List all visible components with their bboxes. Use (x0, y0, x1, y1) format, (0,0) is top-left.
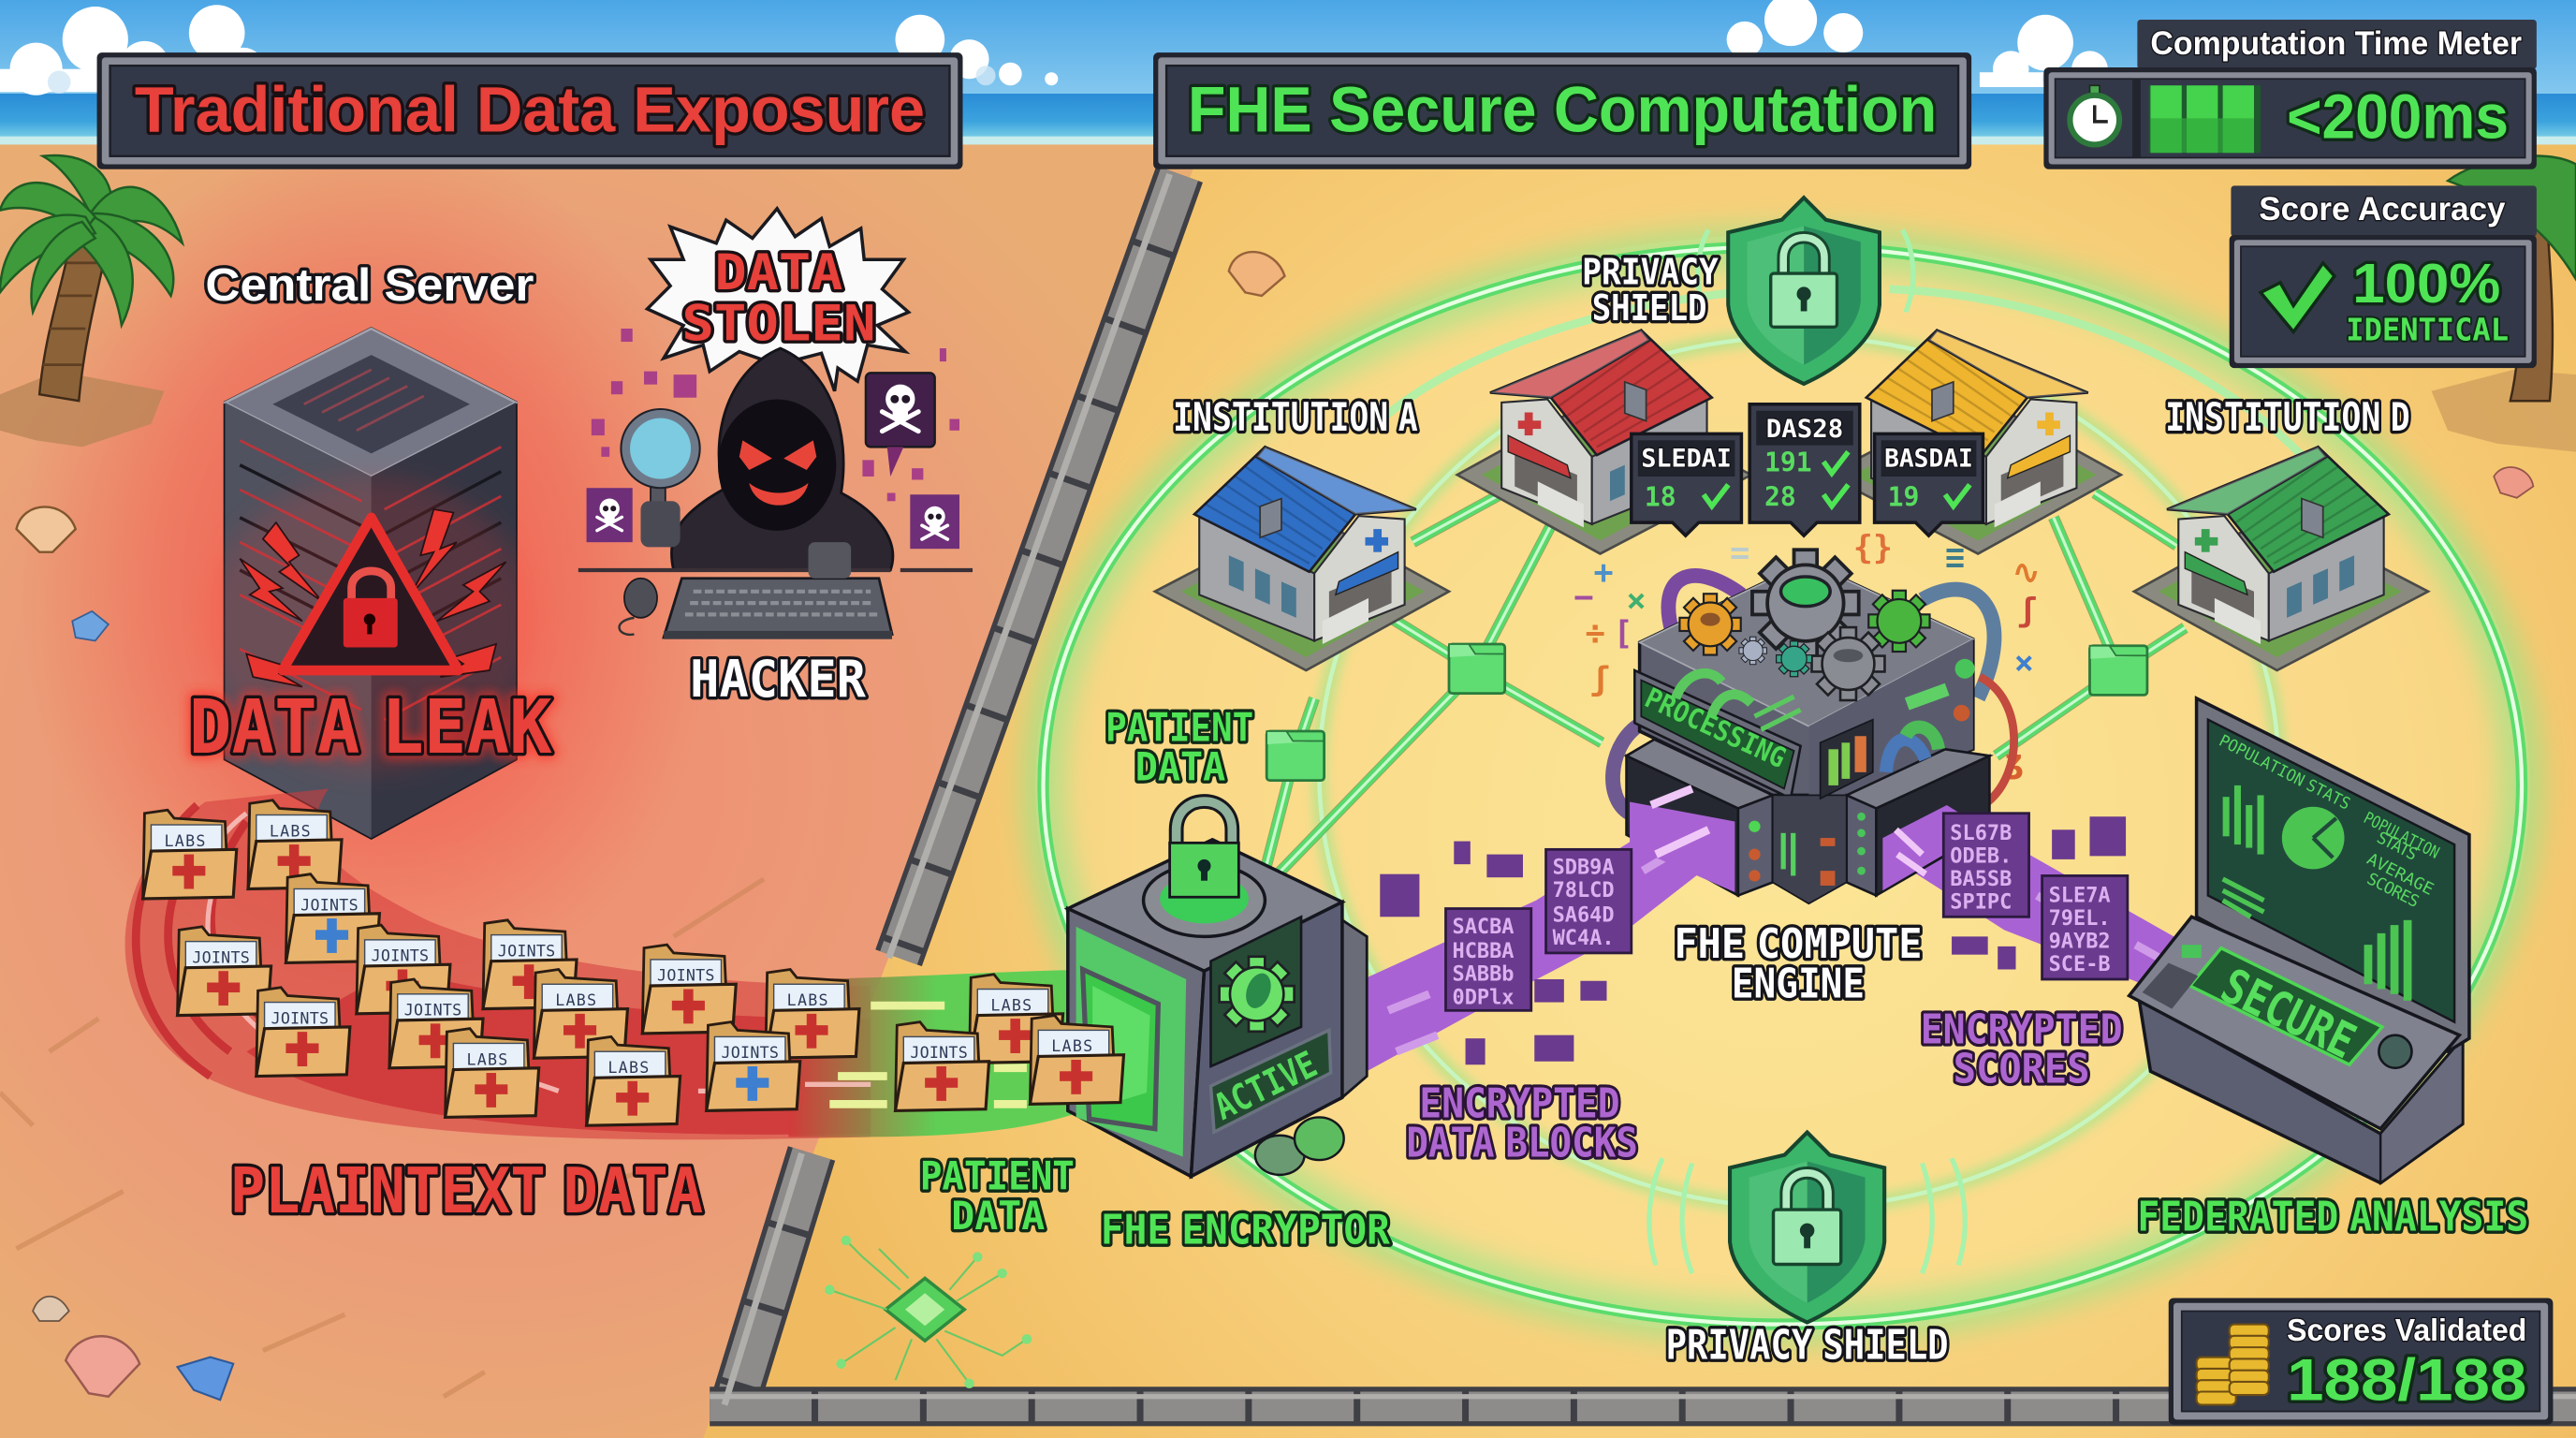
folder: joints blue: JOINTS (300, 896, 359, 914)
patient data label lower (920, 1153, 1075, 1239)
panel: scores validated: Scores Validated (2287, 1313, 2526, 1348)
patient data label upper (1105, 705, 1253, 790)
score tag: sledai: 18 (1645, 482, 1676, 513)
folder: labs: LABS (990, 996, 1032, 1014)
math symbols around engine: ÷ (1586, 614, 1605, 653)
folder: labs (766, 969, 859, 1058)
block 3: ODEB. (1950, 844, 2012, 868)
folder: joints: JOINTS (657, 967, 714, 985)
privacy shield top (1698, 198, 1913, 384)
icon: skull badge large (866, 373, 935, 477)
meter bars (2149, 85, 2261, 153)
encrypted scores label: ENCRYPTED (1921, 1005, 2123, 1053)
data leak label: DATA LEAK (189, 684, 552, 770)
block 2: SDB9A (1553, 857, 1615, 880)
folder: labs (446, 1029, 539, 1117)
encryptor window (1076, 927, 1186, 1157)
folder: labs (970, 975, 1063, 1064)
icon: gold coins (2197, 1325, 2269, 1405)
speech burst: data stolen: DATA (714, 244, 842, 301)
icon: warning triangle with lock (283, 518, 459, 670)
folder: joints: JOINTS (404, 1002, 461, 1020)
folder: labs: LABS (270, 822, 311, 840)
privacy shield label top: PRIVACY (1582, 252, 1720, 294)
block 3: SPIPC (1950, 891, 2012, 915)
server rack with warning (207, 329, 535, 838)
data pixels (592, 329, 959, 501)
math symbols around engine: ʃ (1590, 660, 1610, 698)
icon: skull badge right (910, 494, 959, 549)
encrypted data blocks label: ENCRYPTED (1419, 1079, 1620, 1127)
terminal console: SECURE (2213, 959, 2364, 1070)
privacy shield label top (1582, 252, 1720, 330)
privacy shield bottom (1649, 1132, 1965, 1322)
federated analysis terminal (2130, 698, 2469, 1183)
math symbols around engine: ∿ (2012, 553, 2040, 592)
fhe compute engine (1613, 550, 2014, 903)
palm tree right (2432, 155, 2576, 452)
score tag: sledai: SLEDAI (1641, 445, 1732, 473)
block 2: SA64D (1553, 904, 1615, 928)
wall: stone divider (710, 174, 2576, 1406)
engine right panel (1821, 659, 1975, 799)
math symbols around engine: {} (1853, 529, 1893, 567)
block 2 (1546, 849, 1632, 953)
math symbols around engine: ≡ (1945, 538, 1965, 577)
terminal screen: SCORES (2364, 870, 2422, 912)
folders: plaintext patient records (143, 800, 859, 1125)
patient data label upper: PATIENT (1105, 705, 1253, 751)
encrypted data blocks label: DATA BLOCKS (1406, 1120, 1638, 1167)
folder: labs: LABS (555, 991, 596, 1009)
panel: score accuracy: 100% (2352, 252, 2500, 315)
accuracy heading: Score Accuracy (2259, 191, 2506, 227)
block 1: 0DPlx (1453, 986, 1515, 1009)
block 1: HCBBA (1453, 940, 1515, 963)
folder: joints (896, 1022, 989, 1110)
block 4: SLE7A (2049, 885, 2111, 908)
icons: green data folders (1266, 644, 2147, 781)
institution b house (red) (1457, 330, 1751, 553)
folder: joints: JOINTS (498, 942, 555, 960)
score tag: das28: 191 (1764, 448, 1812, 478)
institution d house (2134, 447, 2428, 670)
block 1 (1445, 909, 1531, 1010)
speech burst: data stolen: STOLEN (681, 295, 875, 352)
terminal base (2139, 999, 2463, 1183)
engine pipes (1613, 576, 2014, 814)
lightning bolts (240, 509, 506, 687)
encrypted data blocks label (1406, 1079, 1638, 1167)
institution a label: INSTITUTION A (1173, 394, 1418, 440)
title banner: traditional data exposure: Traditional Data Exposure (135, 73, 925, 145)
panel: score accuracy: IDENTICAL (2346, 311, 2509, 347)
title banner: FHE secure computation (1153, 52, 1971, 169)
data leak label: DATA LEAK (189, 684, 552, 770)
score tag: das28: DAS28 (1766, 416, 1843, 444)
patient data label lower: PATIENT (920, 1153, 1075, 1199)
encrypted scores label: SCORES (1954, 1046, 2089, 1093)
panel: computation time meter: <200ms (2287, 82, 2509, 152)
math symbols around engine: ʃ (2017, 591, 2037, 629)
block 3: BA5SB (1950, 868, 2012, 891)
engine green coils (1676, 673, 1751, 714)
terminal screen: STATS (2374, 829, 2420, 865)
encryptor gear screen (1211, 917, 1301, 1066)
patient data label lower: DATA (951, 1193, 1045, 1239)
folder: joints (357, 925, 450, 1014)
folder: joints: JOINTS (372, 947, 429, 965)
panel: scores validated (2169, 1298, 2553, 1425)
terminal screen: POPULATION (2361, 809, 2442, 863)
block 2: 78LCD (1553, 879, 1615, 902)
engine center column (1773, 795, 1847, 903)
math symbols around engine: [ (1614, 614, 1633, 653)
encryptor lock (1144, 801, 1265, 936)
hacker face (739, 440, 816, 506)
score tag: basdai (1875, 433, 1983, 536)
math symbols around engine: = (1730, 534, 1749, 572)
title banner: traditional data exposure (97, 52, 962, 169)
score tag: basdai: 19 (1888, 482, 1919, 513)
folder: joints blue (707, 1022, 800, 1110)
shield ring: dome glow (1043, 246, 2522, 1325)
encryptor active sign: ACTIVE (1208, 1044, 1324, 1129)
folder: joints: JOINTS (192, 948, 250, 966)
score tag: sledai (1632, 433, 1741, 536)
shells and pebbles (17, 252, 2533, 1400)
fhe encryptor machine (1068, 801, 1367, 1177)
privacy shield label bottom: PRIVACY SHIELD (1666, 1321, 1949, 1369)
fhe compute engine label: ENGINE (1732, 960, 1865, 1007)
math symbols around engine: ʒ (2004, 742, 2024, 781)
math symbols around engine: × (2014, 644, 2034, 682)
hooded body (671, 348, 893, 570)
folder: labs: LABS (165, 832, 205, 850)
institution a house (1155, 447, 1449, 670)
encryptor pipes (1255, 1117, 1344, 1175)
folder: joints (389, 979, 483, 1068)
panel: computation time meter (2043, 20, 2537, 169)
hacker figure (578, 209, 973, 639)
processing sign: PROCESSING (1640, 682, 1791, 775)
math symbols around engine (1573, 529, 2040, 781)
block 4: 9AYB2 (2049, 931, 2111, 954)
chip decoration (825, 1236, 1032, 1388)
icon: magnifying glass (621, 409, 700, 547)
math symbols around engine: − (1573, 578, 1594, 616)
terminal console (2130, 917, 2459, 1129)
folder: joints blue (285, 874, 379, 962)
folder: labs (248, 800, 342, 888)
fhe encryptor label: FHE ENCRYPTOR (1101, 1207, 1390, 1255)
block 1: SACBA (1453, 916, 1515, 939)
encrypted data blocks (1380, 814, 2128, 1064)
score tag: basdai: BASDAI (1884, 445, 1973, 473)
block 2: WC4A. (1553, 927, 1615, 950)
terminal screen (2197, 698, 2469, 1051)
network links (1265, 493, 2185, 888)
folder: labs (534, 969, 627, 1058)
folder: joints (178, 927, 271, 1016)
terminal screen: AVERAGE (2364, 850, 2437, 900)
fhe compute engine label: FHE COMPUTE (1674, 920, 1922, 968)
accuracy heading (2231, 185, 2537, 237)
block 4: SCE-B (2049, 953, 2111, 976)
meter heading: Computation Time Meter (2150, 25, 2522, 62)
speech burst: data stolen (648, 209, 909, 391)
folder: labs (587, 1036, 681, 1125)
panel: score accuracy (2230, 185, 2537, 368)
hacker label: HACKER (690, 650, 866, 709)
privacy shield label top: SHIELD (1592, 287, 1707, 330)
block 4: 79EL. (2049, 907, 2111, 931)
icon: skull badge left (587, 488, 633, 542)
folder icon center left (1449, 644, 1505, 694)
icon: stopwatch (2070, 85, 2119, 144)
engine right bay (1847, 749, 1989, 895)
encrypted scores label (1921, 1005, 2123, 1093)
icon: check mark (2261, 263, 2334, 332)
block 1: SABBb (1453, 963, 1515, 987)
folder: labs: LABS (787, 991, 828, 1009)
block 4 (2042, 875, 2128, 979)
terminal screen: POPULATION STATS (2216, 732, 2353, 814)
folder: labs: LABS (466, 1050, 507, 1068)
folder: joints blue: JOINTS (721, 1044, 779, 1062)
math symbols around engine: + (1593, 553, 1614, 592)
folder: joints (256, 988, 350, 1077)
engine upper housing (1640, 562, 1973, 795)
engine gears (1679, 550, 1930, 700)
institution d label: INSTITUTION D (2165, 394, 2410, 440)
panel: scores validated: 188/188 (2287, 1347, 2526, 1413)
central server label: Central Server (205, 260, 534, 311)
folder: labs: LABS (607, 1059, 649, 1077)
folder icon left (1266, 731, 1325, 781)
icon: keyboard and mouse (620, 542, 892, 639)
encrypted data stream right (1873, 785, 2188, 990)
patient data label upper: DATA (1135, 744, 1225, 790)
score tag: das28: 28 (1764, 482, 1796, 513)
block 3 (1943, 814, 2029, 917)
folder: labs (143, 810, 237, 899)
plaintext data stream (125, 788, 1150, 1139)
plaintext data label: PLAINTEXT DATA (230, 1154, 703, 1227)
folder: labs: LABS (1051, 1037, 1092, 1055)
folder: joints (642, 945, 736, 1034)
institution c house (yellow) (1827, 330, 2121, 553)
title banner: FHE secure computation: FHE Secure Computation (1188, 73, 1937, 145)
folder: labs (1030, 1016, 1123, 1104)
engine left bay (1627, 740, 1773, 895)
data fragments (1380, 816, 2126, 1064)
folder: joints (483, 920, 577, 1009)
encrypted data stream left (1367, 772, 1745, 1071)
score tag: das28 (1749, 404, 1860, 536)
folder icon right (2089, 646, 2147, 695)
foreground folders entering encryptor (896, 975, 1123, 1110)
screen charts (2223, 785, 2411, 1001)
folder: joints: JOINTS (910, 1044, 968, 1062)
palm tree left (0, 155, 183, 447)
federated analysis label: FEDERATED ANALYSIS (2137, 1194, 2528, 1241)
left zone: red tinted sand (0, 131, 1203, 1438)
sky and ocean background (0, 0, 2576, 148)
block 3: SL67B (1950, 822, 2012, 845)
fhe compute engine label (1674, 920, 1922, 1007)
math symbols around engine: × (1627, 581, 1647, 620)
folder: joints: JOINTS (271, 1009, 329, 1027)
